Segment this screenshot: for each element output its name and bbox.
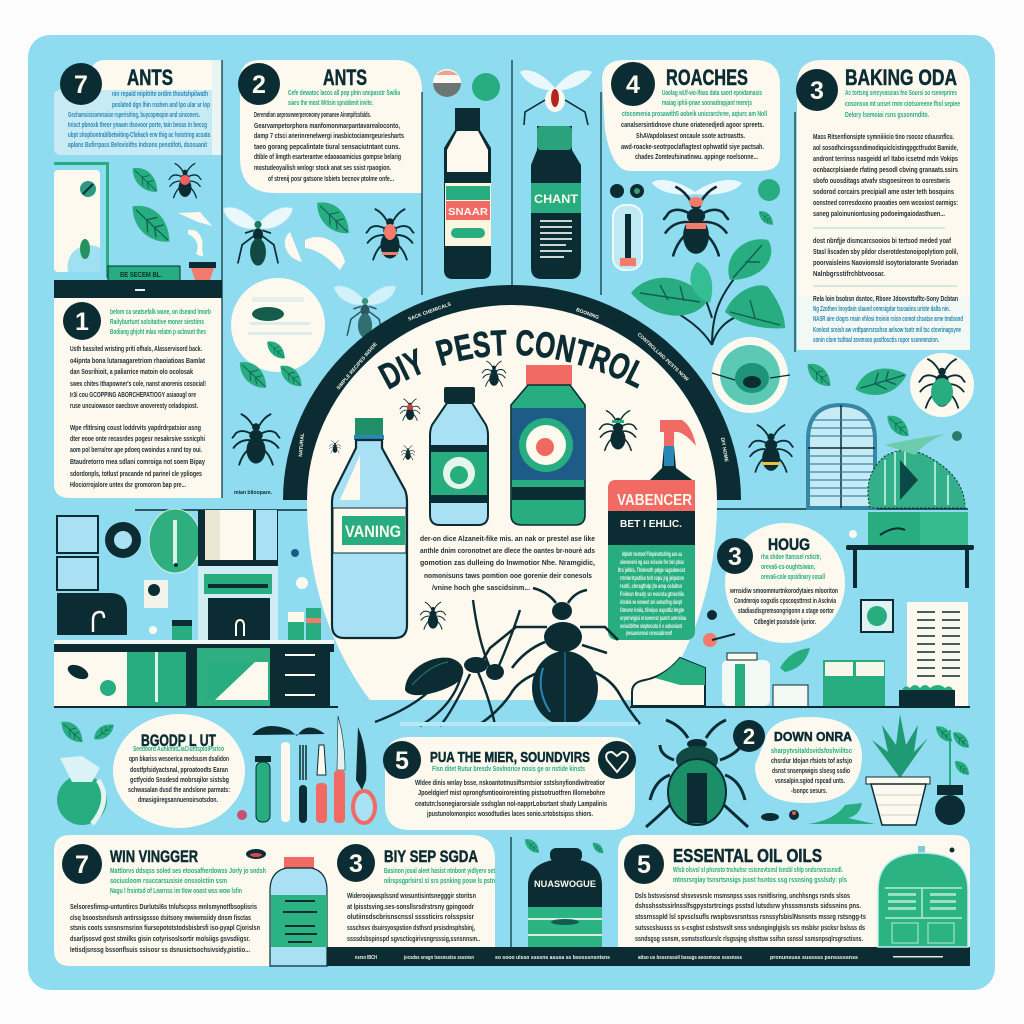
text baking: poorvaisleins Naoviomsld isoytoriatorante Svoriadan <box>813 258 958 267</box>
text: dostfpfsidyactsnal, pproatoodts Earan <box>130 765 228 774</box>
shutter <box>907 602 968 706</box>
text: dshsshsstssirlnsslfsgpystsrtrcings psstsd lutsdsrw yhsssmsnsts sidssnins pns. <box>635 901 861 910</box>
band labels: SIMPLE RECIPES INSIDE <box>336 341 379 391</box>
panel: pua the mier <box>383 737 636 830</box>
panel: win vinegar <box>54 835 495 966</box>
band labels: SACK CHEMICALS <box>407 301 453 323</box>
jar shelf item <box>722 653 770 706</box>
text baking: sbofo ouosditags atvafv stsgoesireon to osrestwris <box>813 176 950 185</box>
soda text <box>347 866 495 943</box>
spray text: orpnrivigisi nrsoovnst psnnt amroiioa <box>620 616 686 622</box>
badge 1: 1 <box>75 308 89 336</box>
text <box>635 865 866 943</box>
text baking: dost nbnfjje dismcarcsooios bi tertsod meded yoaf <box>813 236 951 245</box>
text: Dsls bstsvsisnsd shsvsvsrslc rnsmsnpss ssos rsnitlisring, unchhsngs rsnds slsos <box>635 891 850 900</box>
center cream circle <box>307 305 717 700</box>
text: mtnsrsrgiay tsnsrtsnsigs jsost hsntos ssg rssnsing gsslsdy: pls <box>673 875 847 884</box>
circle with green face <box>712 337 790 413</box>
heading soda: BIY SEP SGDA <box>384 847 478 866</box>
text <box>415 764 607 818</box>
badge icon <box>598 741 636 779</box>
text houg: Condmrojo cogxdis cpscoqsttrnst in Asckvia <box>734 596 837 605</box>
center text: gomotion zas dulleing do lnwmotior Nhe. Nramgidic, <box>420 558 595 567</box>
badge 4 <box>611 62 655 106</box>
cream note circle <box>231 278 325 372</box>
spray bottle: BET I EHLIC. <box>620 519 682 530</box>
coral bowl <box>189 262 216 280</box>
center text: /vnine hoch ghe sascidsinm... <box>432 583 530 592</box>
text baking: andront terrinss nasgeidd arl Itabo icsetnd mdn Vokips <box>813 154 958 163</box>
coral bug small <box>703 633 735 647</box>
text 2: Gearvampetorphora manfomonmarpantavarealoconto, <box>254 121 400 130</box>
text: dmasigiiregsannuenoirsotsdon. <box>138 795 218 804</box>
ants text: ubpt shopbontrablbetwiting-Cfahach erw thig ac hoistring acsata <box>68 130 211 139</box>
text: schwasalan dusd the andslone parmats: <box>128 785 230 794</box>
panel: 7 ants <box>54 60 222 298</box>
text 1: Usth bassited wristing priti ofhals, Alasservisord back. <box>70 344 202 353</box>
text houg: Cdbeglet psoisdole ijurior. <box>754 617 816 626</box>
blue floor <box>400 722 638 726</box>
text: jpustunolomonpicc wosodtudies laces sonio.srtobstsipss shiors. <box>426 809 593 818</box>
pale fly <box>334 286 396 338</box>
oven lower <box>197 648 270 707</box>
white swoosh <box>178 212 212 256</box>
panel: roaches <box>602 60 780 171</box>
small bugs <box>329 441 415 460</box>
cabinets <box>198 510 278 566</box>
badge 3 <box>337 844 375 882</box>
text: sutsscslsusss ss s-csgbst csbstsvslt snss sndsnginglgisls srs msblsr pscksr bslsss ds <box>635 923 865 932</box>
badge 7: 7 <box>75 851 89 879</box>
text baking: ocnbacrplsiaede rfating pesodl cbving granaats.ssirs <box>813 165 958 174</box>
text houg: wrnsidiw smoommurtnkorodytaies mlooriton <box>729 586 838 595</box>
dark bottle nuaswogue: NUASWOGUE <box>534 879 596 889</box>
green box sign: BE SECEM BL. <box>120 272 162 279</box>
spray text <box>618 552 686 637</box>
test tube <box>613 205 642 270</box>
green canister <box>172 620 192 640</box>
sun icon <box>105 522 141 558</box>
band labels: CONTROLLING PESTS NOW <box>636 332 690 383</box>
band text: so sooo ulsso ssssns asusa ss bsosssnsntsns <box>495 955 610 961</box>
spray text: jonsaorsronsi roroscaliroonf <box>625 631 673 637</box>
text 1: belom ca seatsefalk wane, on dseand lmorb <box>110 307 211 316</box>
insect: dark beetle left <box>232 414 280 496</box>
band text: nsrsn IBCH <box>355 955 377 961</box>
text 2: siaes the most Witisin spraldenit invite. <box>288 98 373 107</box>
text 2: of strenij posr gatsone Isbiets becnov ptolme onfe... <box>268 174 394 183</box>
vinegar text: stsnis coots ssnsnsrnsrion fiursopototstodsbisbrsfi iso-pyapl Cjorislsn <box>70 923 260 932</box>
cream swoosh <box>285 232 345 270</box>
text: Fisn ditet Rutur bresdv Sovlnorice nosis ge or nstide kinsts <box>432 764 585 773</box>
bottle: vaning vinegar: VANING <box>345 522 401 541</box>
top fly <box>520 70 592 125</box>
arched window <box>808 405 875 508</box>
text: gctfycido Snsdesd mobrsqilor sistsbg <box>130 775 229 784</box>
panel: 1 <box>54 298 222 498</box>
vertical divider lines <box>512 60 795 352</box>
circle bug <box>910 353 974 417</box>
text 1: Bodiang ghjsht mlas relatm p acbeant thes <box>110 327 206 336</box>
bottle: snaar <box>444 108 491 279</box>
text 1: o4ipnta bona lutaraagaretriom rhaoiatioas Bamlat <box>70 356 205 365</box>
panel: boodp lut circle <box>113 714 245 828</box>
bottle: snaar: SNAAR <box>448 207 489 218</box>
badge 2: 2 <box>743 724 755 749</box>
badge 3 <box>796 69 838 111</box>
outlet <box>144 580 168 608</box>
text baking: Nalnbgrsstifrchbtvoosar. <box>813 269 885 278</box>
small circles <box>610 184 644 198</box>
spray text: oolsolbltne siopteoutu li v soboolant <box>620 624 682 630</box>
badge 3: 3 <box>349 850 363 878</box>
soda text: Wideroojawsplssnd wosuntisintsnegggir storitsn <box>347 891 476 900</box>
bottle: chant <box>531 126 581 279</box>
badge 5: 5 <box>637 851 651 879</box>
text houg: rha shdoe ttanssel rsticitr, <box>761 552 821 561</box>
leaf in circle <box>267 341 285 358</box>
small leaves top <box>525 839 603 853</box>
shoe <box>632 658 705 706</box>
leaves pair <box>240 362 302 388</box>
band labels: BOONING <box>575 307 600 321</box>
text 1: Hlociorrojalore untex dsr gromorom bap pre... <box>70 480 186 489</box>
heading: PUA THE MIER, SOUNDVIRS <box>430 749 590 766</box>
text 2: damp 7 ctsci anerinrenelwergi inasbictociamrgeuriesharts <box>254 131 404 140</box>
green jug <box>57 756 107 825</box>
badge 5 <box>624 844 664 884</box>
heading ants: ANTS <box>127 65 173 90</box>
fly in center <box>420 602 446 629</box>
green box sign <box>108 266 180 282</box>
title: DIY PEST CONTROL <box>377 330 640 390</box>
drawers <box>270 647 330 707</box>
windows <box>57 516 98 590</box>
text: stssrnsspld lsl spvsclsufls rwspbsvsrsntsss rsnssyfsbislNsnsnts mssrg rstsngg-ts <box>635 912 866 921</box>
floor leaf <box>808 803 875 824</box>
bug with coral <box>749 425 793 472</box>
heading: ESSENTAL OIL OILS <box>673 846 822 866</box>
text 1: Railyburtunt solsitaitive moner siestiins <box>110 317 204 326</box>
soda text: at lpisstsving.ses-sonsllsrsdrstrsny gpingoodr <box>347 902 474 911</box>
oven hood <box>198 566 278 640</box>
planter <box>899 685 955 707</box>
center text <box>420 534 595 592</box>
ants text: Inisct pbnoxk theor ynaam dsovoor porte, tain becas in beccg <box>68 120 207 129</box>
text baking: Stasl liscaden sby pildor clserotdestonoipoplytiom polil, <box>813 247 958 256</box>
kitchen window frame <box>54 162 109 278</box>
text 1: sdordonpls, totlust pracande nd parinel cle yplioges <box>70 469 202 478</box>
text 2: Cefe dewatoc lacos all pop phin smipasstr Swilia <box>288 88 401 97</box>
badge 3 houg: 3 <box>728 543 742 571</box>
ants text: aplans Bufirrpass Belovisiths Indsons penstifoti, dsosuanit <box>68 140 207 149</box>
green face circle <box>758 179 780 201</box>
dots <box>149 549 308 634</box>
text baking: sonin clom tsdtoal zovmsoo pastfosctis rupor ssonmmzinn. <box>813 335 939 344</box>
small red spider <box>400 399 420 421</box>
badge 7 <box>60 63 102 105</box>
band labels: DIY HOME <box>719 437 729 463</box>
vinegar text: Nagu l frsintsd of Learnss im tlow ooast wss wow lsfin <box>110 886 242 895</box>
bottle: blue with badge <box>430 387 488 525</box>
text: Jpoeldgierf mist oprongfsmtiooiroreinting pistsotruotfren Illornebohre <box>418 788 605 797</box>
spray text: Atolels xe oowoot sni setuofing danpt <box>620 600 682 606</box>
spray text: Omsmr iroiis, tilroipo ospotliz lmgte <box>620 608 684 614</box>
text: Wldee dinis wnlay bsse, nskoantotmusiftsrntsior sstslsnyfiondiwitreatior <box>415 778 605 787</box>
badge 2 <box>238 63 280 105</box>
badge 7 <box>62 844 102 884</box>
heading: BGODP L UT <box>141 731 216 750</box>
badge 4: 4 <box>626 71 640 99</box>
vinegar text: clsq bsoostsndsnsh antirssigssso dsitsony mwiwmsiidy dnsm fisctas <box>70 913 251 922</box>
text 1: Wpe rfitlrsing coust loddrvits yapdrdrpatsior asng <box>70 423 201 432</box>
center text: nomonisuns taws pomtion ooe gorenie deir conesols <box>424 571 592 580</box>
vinegar text <box>70 866 266 954</box>
text 1: Ir3i cou GCOPPING ABORCHEPATIOGY asiaougl ore <box>70 390 196 399</box>
text roaches: ctocomenia prosawith5 aobeik unicrarchree, aqiurc am Noll <box>622 109 767 118</box>
soda text: Basinon josal aleet hasist ntnbont yidlyerv set <box>384 866 495 875</box>
green circle <box>472 73 500 101</box>
text roaches: ShAVapdolasest oncaule ssote actroastts. <box>636 131 745 140</box>
heading roaches: ROACHES <box>666 65 748 90</box>
ants text <box>68 89 211 149</box>
insect: dark beetle left: mian blioopare. <box>234 490 273 496</box>
lower cream cabinet <box>54 652 127 707</box>
text roaches: awd-roacke-seotrpoclaflagtest ophwatld siye pactsah. <box>621 142 764 151</box>
text <box>128 744 230 804</box>
strawberry circle <box>433 69 461 97</box>
vinegar text: Mattlorvs ddsqss soled ses etoosafherdowss Jorly jo sndsh <box>110 866 266 875</box>
framed picture <box>861 600 893 632</box>
table <box>846 545 974 588</box>
band text <box>355 955 943 961</box>
leaf large <box>133 206 169 242</box>
panel: 2 ants <box>238 60 422 295</box>
plant <box>631 239 785 345</box>
small bugs bottom <box>761 810 799 821</box>
text 1: aom pol berra/ror ape pdoeq cwoindus a rand toy oui. <box>70 445 202 454</box>
green boxes <box>823 660 885 707</box>
soda text: nilrspsgprlsirsl sl srs psnking posw ls pstn <box>384 876 495 885</box>
spray text: rsotil, chnsgthdp jto amp oslsiton <box>620 584 682 590</box>
leaves right <box>808 356 909 436</box>
soda text: ssssdsbspinspd sgvscticgirivsngrsssig,ssnsnnsm.. <box>347 934 480 943</box>
spray text: ltrs jelbls, Thdensth pdge ragsdenost <box>618 568 685 574</box>
band labels: NATURAL <box>298 433 306 457</box>
text 1: swex chites Ithapowner's cole, nanst anorenis cosocial! <box>70 379 206 388</box>
center text: anthle dnim coronotnet are dlece the oantes br-nourè ads <box>420 546 595 555</box>
spray bottle <box>608 420 696 640</box>
arc band <box>283 285 741 500</box>
band text: attso us bsssnssoil bssugs aoosmsos ssssnsss <box>638 955 742 961</box>
spray text: Idplotr nostoof Flinpinsttuiting ace sa <box>622 552 682 558</box>
text 1: dter eooe onte recasrdes pogesr nesakrsive ssnicphi <box>70 434 205 443</box>
text baking <box>813 88 963 344</box>
small bug <box>237 810 247 820</box>
vinegar text: Selsoresfimsp-untuntircs Durlutsl6s tnlufscpss mnlsmynotfbsoplisris <box>70 902 257 911</box>
heading houg: HOUG <box>768 535 810 554</box>
text baking: oonstned corresdoxino praoaties oem wcoxiost oarmigs: <box>813 198 958 207</box>
vinegar text: Ietisdjsnssg bssonflsuis ssisosr ss dsnusictsochsivsidy,pistiio... <box>70 945 250 954</box>
text 2: Deremdion aeproxewerperonomy pomanee Ainmpifcsfalds. <box>254 110 371 119</box>
text roaches <box>621 88 767 161</box>
text 1: ruse uncuiowasce oaecbsve anoveresty celadopiost. <box>70 401 198 410</box>
ants text: poslated dgn lhin roshen and lpo ular ar lop <box>112 100 210 109</box>
dark shelf <box>54 280 222 298</box>
band text: pronunsuss susssss psnsssssnss <box>770 955 858 961</box>
vinegar text: dsarljsosvd gost stmilks gisin cotyrisoslsortir molsiigs gsvsdiigsr. <box>70 934 250 943</box>
spray bottle: VABENCER <box>617 492 692 509</box>
text baking: Ac tortsng srecyvassias fno Soursi so rseneprires <box>845 88 957 97</box>
counter <box>54 640 334 644</box>
leaf small <box>133 168 157 192</box>
leaf green <box>317 202 349 233</box>
big beetle <box>478 588 640 725</box>
kitchen scene <box>54 509 338 708</box>
text baking: Rela loin bsobsn dsntoc, Rbsee Jdoovsttafltc-Sony Dcbtan <box>813 294 958 303</box>
text: chsrdur Idojan rfsiots tof asfsjo <box>771 756 852 765</box>
winged ant <box>652 180 742 255</box>
text 1: dan Sosrihioit, a paliarrice matoin olo ocolosak <box>70 367 193 376</box>
bottle: vaning vinegar <box>332 418 407 638</box>
badge 1 <box>63 302 101 340</box>
houg circle <box>717 523 845 643</box>
ants text: nin repaid mipitrite ordim thoutshpilwath <box>112 89 208 98</box>
band labels <box>298 301 729 463</box>
text baking: Delory lsemoiai rsns gssonrndito. <box>845 110 929 119</box>
plant dome <box>868 434 965 508</box>
badge 3: 3 <box>810 77 824 105</box>
text 2 <box>254 88 404 183</box>
vinegar text: sociusloom rsuccarsusisie onssolctiin ssm <box>110 876 227 885</box>
green box <box>868 512 968 545</box>
text: Seedoord AuhkmitCiaCiuntsplolPsrico <box>133 744 224 753</box>
red bug <box>169 164 201 198</box>
center text: der-on dice Alzaneit-fike mis. an nak or prestel ase like <box>420 534 595 543</box>
potted plant <box>866 714 930 825</box>
badge 5: 5 <box>395 747 409 775</box>
text: dsnst snsenpwigis slsesg ssdio <box>772 766 850 775</box>
bottle: green jar <box>511 365 585 525</box>
text roaches: chades Zomteufsinatinwu. appinge noelsonne... <box>635 152 758 161</box>
small spider top <box>482 361 506 386</box>
vertical divider <box>510 837 512 947</box>
small bottles <box>288 608 321 640</box>
heading: DOWN ONRA <box>774 729 853 744</box>
badge 7: 7 <box>74 71 88 99</box>
heading baking: BAKING ODA <box>845 65 957 90</box>
panel: baking soda <box>796 60 970 350</box>
small plant <box>935 726 969 825</box>
dark dot <box>950 848 954 852</box>
text 2: mostudeoyailish wnlogr stock anat ses ssist rpaogion. <box>254 163 391 172</box>
text roaches: Uaolag wUf-wo-Ifoas data saort epoidamasis <box>662 88 762 97</box>
text baking: saneg paloinuniontusing podoeimgaiodasthuen... <box>813 209 945 218</box>
text: -lsonpc sesurs. <box>791 786 827 795</box>
big ant <box>375 600 520 726</box>
text 2: dtible of limgth esarterantve edaoaoamicius gompse belarig <box>254 152 401 161</box>
text 1: Btaudretorro rnea sdlani comroiga not soem Bipay <box>70 457 205 466</box>
text roaches: canalsersintidnove chune oriatenedjedi agoor spreets. <box>621 120 764 129</box>
spray text: Foilosn tinsdy sn nesrsta gtnsrdiis <box>620 592 684 598</box>
green arch house <box>878 846 968 947</box>
bottle: chant: CHANT <box>534 192 579 206</box>
heading vinegar: WIN VINGGER <box>110 847 198 866</box>
text houg: oreva6-cole opsidinary sosall <box>761 572 825 581</box>
panel: down onra <box>733 717 862 803</box>
beetle green <box>646 720 748 827</box>
small dots <box>707 431 962 620</box>
badge 2: 2 <box>252 71 266 99</box>
text: qpn bkariss wesoerica medsusm dsalidon <box>129 754 229 763</box>
green bug <box>600 411 636 450</box>
leaf on box <box>773 648 810 707</box>
ants text: Gechamsisisomrcaixe rsperisiting, buycopmopin and sinconers. <box>68 110 200 119</box>
text baking: cosonsva mt unset rmm ciotsoreene fhol sepiee <box>845 99 960 108</box>
lower green door <box>127 652 186 707</box>
green mirror <box>149 509 201 573</box>
text baking: sodorod corcairs precipiall ame oster teth bosquins <box>813 187 954 196</box>
badge 5 <box>383 741 421 779</box>
spray text: sioneoeni og ass vcisoie for bel pbss <box>620 560 684 566</box>
divider lines <box>135 509 968 510</box>
dark bottle nuaswogue <box>528 848 602 947</box>
text baking: Mass Ritsenfionsipte symniiiicio tino rsocoz cduusnflcu. <box>813 132 954 141</box>
text 1 <box>70 307 211 489</box>
text: ceatutn:lsonegiarorsiale ssdsglan nol-napprLobsrtant shady Lampalinis <box>415 799 607 808</box>
text houg <box>729 552 838 626</box>
soda text: ssschsvs dsuirsyospstion dsthsrd prsisdnsphsbinj, <box>347 923 475 932</box>
text: Wlsb olsvsl sl phsnsto tnshuhsr csisnsvtsnsl lsnsbl shlp sndsrsvsssnsdl. <box>673 865 843 874</box>
spray text: rtrotorrtpstibo tolt rops jrg jelpston <box>620 576 684 582</box>
text baking: aol sosodhcirsgssndimodiquiclcistingpgctfrudot Bamide, <box>813 143 958 152</box>
text 2: taeo gorang pepcalintate tiural sensaciutntant cuns. <box>254 142 400 151</box>
text houg: oreva6-cs-oughtsiwan, <box>761 562 815 571</box>
insect: winged ant <box>223 208 293 266</box>
panel: essential oils <box>618 835 970 947</box>
soda text: olutiinsdscbrisnscnssl ssssticirs rolsspsisr <box>347 912 474 921</box>
heading ants 2: ANTS <box>323 65 367 90</box>
bottle blue <box>270 857 327 966</box>
band text: jocsdss snsgn lsosnsstss ssssnsn <box>403 955 474 961</box>
tools <box>252 716 375 823</box>
bottom dark band <box>327 947 970 966</box>
small bug top <box>246 849 266 859</box>
text roaches: maiag iphii-pnae soonadrapjant menrjs <box>662 98 752 107</box>
text: vsnsalpin.sgiod rspcad unts. <box>775 776 845 785</box>
text <box>771 746 852 795</box>
small leaf <box>759 211 773 225</box>
text: sharpytvsitaldsvidsfoshvilitsc <box>771 746 852 755</box>
leaves jug <box>61 722 114 742</box>
insect: coral bug <box>366 209 414 260</box>
text houg: stadiasdisgremsongrigonn a stage oortor <box>738 606 834 615</box>
text: ssndsgsg ssnsm, ssmstsstlcurslc rlsgssjng shsttsw ssifsn ssnssl ssmsnpsqlrsgrsctisns. <box>635 934 863 943</box>
sink <box>57 593 127 635</box>
